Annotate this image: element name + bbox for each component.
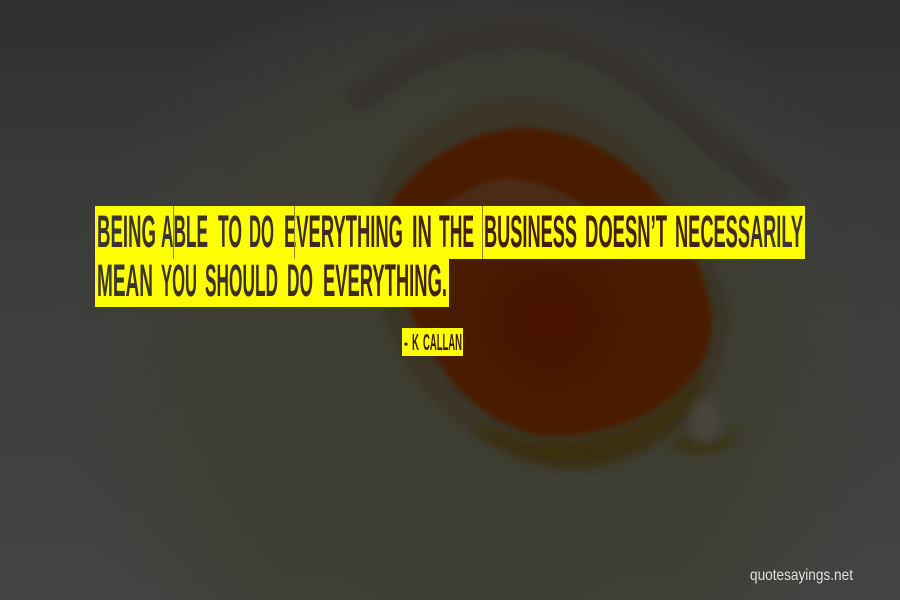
membrane lump xyxy=(670,425,741,454)
quote line 1: ABLE xyxy=(161,206,208,257)
author attribution: - xyxy=(404,329,408,355)
quote line 2: YOU xyxy=(161,255,197,306)
highlight: line 1 xyxy=(95,206,805,259)
egg white arc xyxy=(352,34,785,200)
quote line 2: DO xyxy=(287,255,313,306)
quote line 1: DO xyxy=(249,206,274,257)
quote line 1: BEING xyxy=(97,206,156,257)
author attribution: K xyxy=(412,329,419,355)
quote line 2: MEAN xyxy=(97,255,153,306)
quote line 1: THE xyxy=(439,206,474,257)
quote line 1 xyxy=(97,206,803,257)
quote text block with yellow highlight xyxy=(95,206,805,307)
yolk xyxy=(387,128,711,436)
yolk underside shadow xyxy=(470,370,700,467)
quote text block with yellow highlight: EVERYTHING. xyxy=(323,255,447,306)
quote line 1: TO xyxy=(218,206,242,257)
yolk halo xyxy=(368,97,729,466)
text: CALLAN xyxy=(423,329,462,355)
quote line 2 xyxy=(97,255,447,306)
quote line 2: SHOULD xyxy=(205,255,278,306)
author attribution xyxy=(402,328,463,356)
quote line 1: EVERYTHING xyxy=(284,206,403,257)
highlight: line 2 xyxy=(95,259,449,307)
quote line 1: DOESN’T xyxy=(585,206,667,257)
site watermark: quotesayings.net xyxy=(750,567,853,584)
quote line 1: IN xyxy=(412,206,432,257)
quote line 1: BUSINESS xyxy=(484,206,577,257)
